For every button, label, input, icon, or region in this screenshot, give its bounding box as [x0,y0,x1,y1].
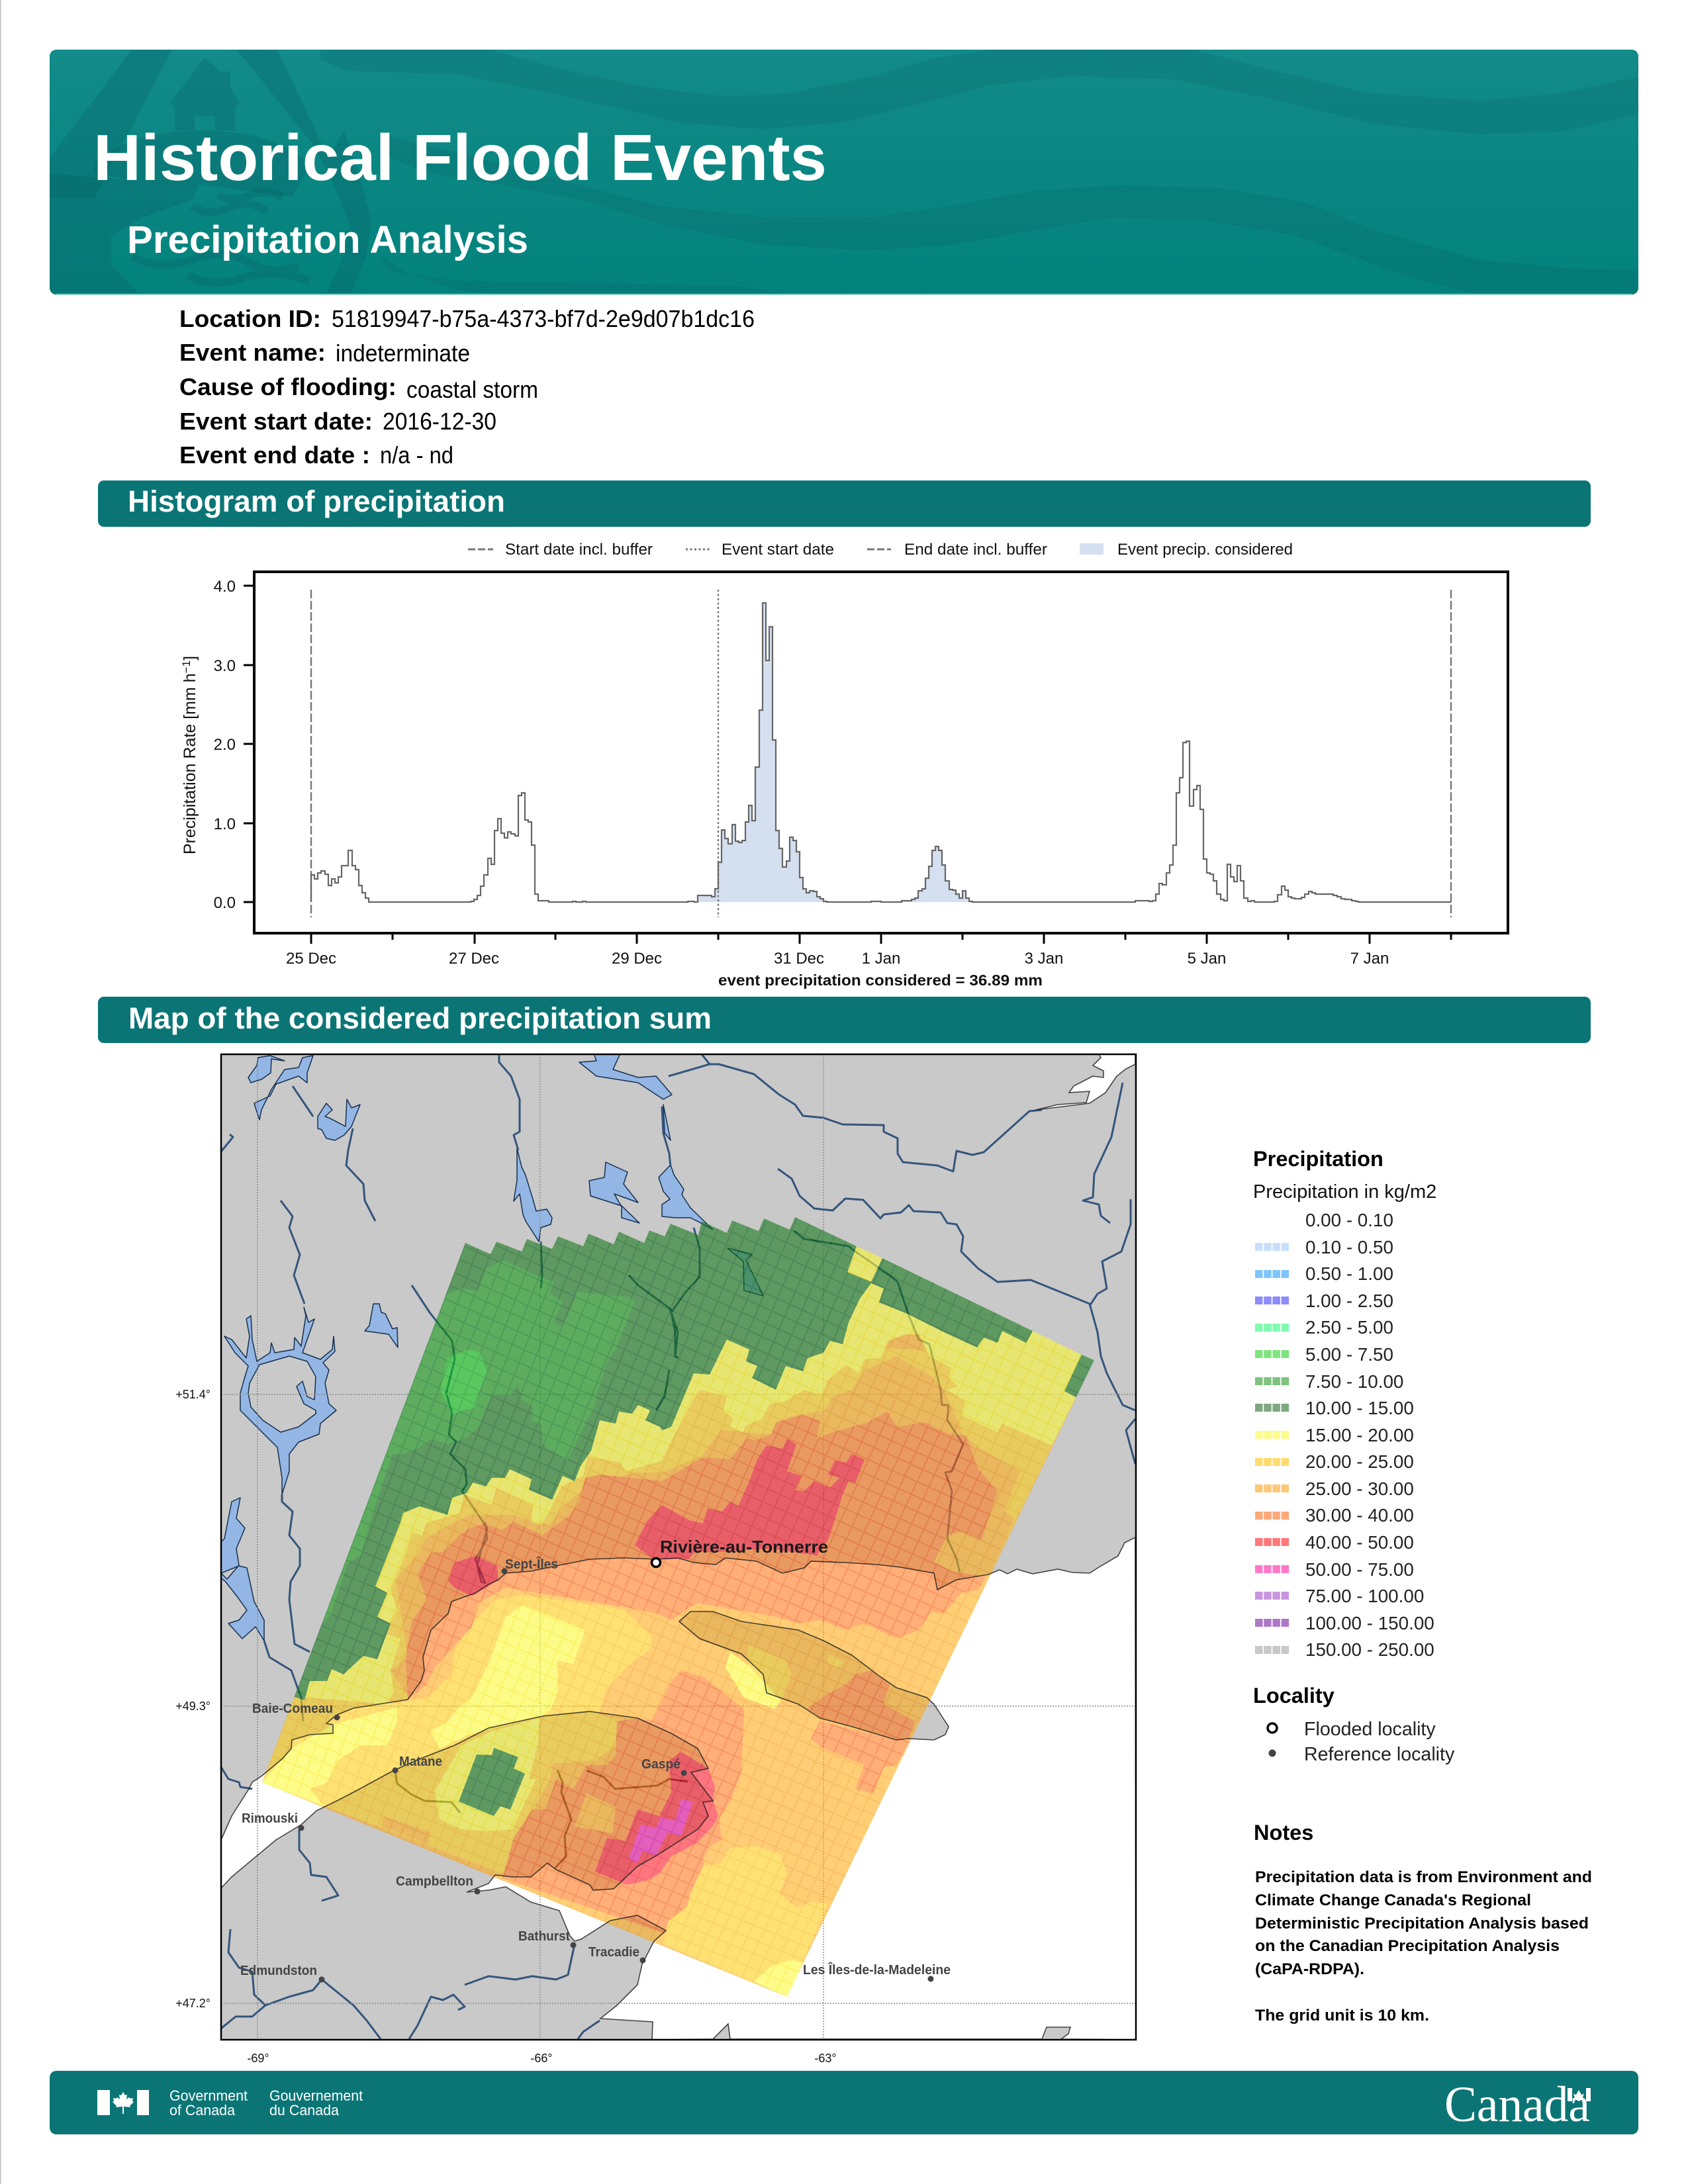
event name [179,339,470,367]
legend classes: 25.00 - 30.00 [1305,1479,1414,1499]
y axis labels: 1.0 [214,815,236,833]
latitude labels: +49.3° [175,1700,211,1713]
legend classes: 10.00 - 15.00 [1305,1398,1414,1418]
event name: indeterminate [336,340,470,367]
histogram chart [180,572,1508,989]
notes heading: Notes [1254,1821,1313,1844]
y axis ticks [244,586,254,902]
event name: Event name: [179,339,326,366]
legend classes: 75.00 - 100.00 [1305,1586,1424,1606]
locality: Les Iles-de-la-Madeleine: Les Îles-de-la-Madeleine [803,1962,951,1978]
section heading: histogram: Histogram of precipitation [128,484,505,518]
class 40-50 [262,1089,1096,1997]
x axis labels: 5 Jan [1188,950,1226,968]
y axis labels: 3.0 [214,657,236,675]
x axis ticks [311,933,1451,944]
subtitle: Precipitation Analysis [127,218,528,261]
land base [221,1054,1136,2040]
legend classes: 1.00 - 2.50 [1305,1291,1393,1311]
notes body: Deterministic Precipitation Analysis based [1255,1915,1589,1933]
map frame [221,1054,1136,2040]
y axis labels [214,578,236,912]
event metadata block [179,305,755,469]
locality: Gaspe: Gaspé [641,1757,680,1772]
event start date: Event start date: [179,408,373,435]
legend classes: 50.00 - 75.00 [1305,1559,1414,1580]
canada wordmark: Canada [1444,2077,1590,2132]
x axis labels: 31 Dec [774,950,824,968]
event end date: Event end date : [179,441,370,469]
y axis title: ] [181,656,199,660]
map [175,1052,1136,2065]
banner wave decoration [320,50,1644,296]
title: Historical Flood Events [93,121,827,194]
locality: Sept-Iles: Sept-Îles [505,1556,558,1572]
x axis labels: 1 Jan [862,950,900,968]
locality: Matane [392,1754,442,1774]
locality: Edmundston: Edmundston [240,1964,317,1978]
anticosti island [679,1612,949,1740]
section heading: histogram [98,480,1591,527]
class 20-25 patches [662,1644,843,1996]
legend classes: 7.50 - 10.00 [1305,1371,1403,1392]
section heading: map [98,997,1591,1043]
x axis labels: 29 Dec [612,950,662,968]
legend classes: 30.00 - 40.00 [1305,1505,1414,1525]
notes body [1255,1868,1592,2025]
class 10-15 [262,1089,1096,1997]
x axis labels: 7 Jan [1350,950,1389,968]
legend unit: Precipitation in kg/m2 [1253,1181,1436,1203]
section heading: map: Map of the considered precipitation sum [128,1001,712,1035]
latitude labels: +47.2° [175,1997,211,2010]
flooded locality: Riviere-au-Tonnerre: Rivière-au-Tonnerre [660,1537,828,1557]
legend classes [1255,1210,1434,1660]
class 25-30 north [381,1356,1020,1844]
legend: end date: End date incl. buffer [904,541,1047,559]
banner flood logo watermark [50,50,371,296]
class 7.5-10 [262,1089,1096,1997]
class 25-30 base [262,1217,1076,1996]
legend classes: 20.00 - 25.00 [1305,1451,1414,1472]
latitude labels [175,1388,211,2010]
legend: flooded locality: Flooded locality [1304,1719,1436,1740]
chart frame [254,572,1508,933]
notes body: The grid unit is 10 km. [1255,2007,1429,2025]
cause of flooding [179,373,538,403]
legend classes: 2.50 - 5.00 [1305,1317,1393,1338]
notes body: (CaPA-RDPA). [1255,1960,1364,1978]
legend heading: precipitation: Precipitation [1253,1147,1383,1171]
rivers [221,1052,1135,2039]
legend classes: 150.00 - 250.00 [1305,1639,1434,1660]
precipitation grid overlay [262,1217,1094,1997]
locality: Gaspe [641,1757,687,1776]
government of canada flag signature [97,2087,363,2118]
locality: Rimouski: Rimouski [242,1811,298,1826]
class 30-40 [406,1412,998,1934]
notes body: Climate Change Canada's Regional [1255,1891,1531,1909]
notes body: Precipitation data is from Environment and [1255,1868,1592,1886]
class 20-25 [262,1347,1076,1873]
legend classes: 0.10 - 0.50 [1305,1237,1393,1257]
x axis labels: 3 Jan [1025,950,1063,968]
cause of flooding: coastal storm [406,376,538,403]
longitude labels [247,2052,837,2065]
y axis labels: 0.0 [214,894,236,912]
locality: Matane: Matane [399,1754,442,1769]
header banner [50,50,1644,296]
locality: Baie-Comeau: Baie-Comeau [252,1702,333,1716]
x axis labels: 27 Dec [449,950,499,968]
location id: 51819947-b75a-4373-bf7d-2e9d07b1dc16 [332,305,755,332]
legend: start date: Start date incl. buffer [505,541,653,559]
legend classes: 5.00 - 7.50 [1305,1344,1393,1365]
latitude labels: +51.4° [175,1388,211,1401]
event end date [179,441,453,469]
legend: reference locality: Reference locality [1304,1744,1455,1765]
y axis labels: 4.0 [214,578,236,596]
government of canada flag signature: Government [169,2087,248,2104]
map legend [1253,1147,1455,1765]
longitude labels: -69° [247,2052,269,2065]
flooded locality: Riviere-au-Tonnerre [651,1537,828,1567]
gaspe rivers [395,1770,688,1868]
class 15-20 [262,1246,1094,1997]
reference localities [240,1556,951,1983]
location id: Location ID: [179,305,321,332]
precipitation rate step line [311,603,1451,902]
locality: Campbellton: Campbellton [396,1874,473,1889]
vertical reference lines [311,590,1451,917]
event start date: 2016-12-30 [383,408,496,435]
locality: Tracadie: Tracadie [588,1945,639,1960]
event start date [179,408,496,435]
class 50-75 [262,1089,1096,1997]
cause of flooding: Cause of flooding: [179,373,397,400]
class 5-7.5 [262,1089,1096,1997]
legend classes: 15.00 - 20.00 [1305,1425,1414,1445]
gulf water [221,1052,1136,2040]
legend: event precip: Event precip. considered [1117,541,1293,559]
map graticule [221,1054,1136,2040]
event end date: n/a - nd [380,441,453,469]
coastlines [221,1052,1136,2040]
legend classes: 0.00 - 0.10 [1305,1210,1393,1230]
y axis title: −1 [180,660,193,673]
y axis title: Precipitation Rate [mm h [181,673,199,854]
legend: event start: Event start date [722,541,834,559]
government of canada flag signature: Gouvernement [269,2087,363,2104]
footer bar [50,2071,1638,2134]
histogram legend [468,541,1293,559]
notes body: on the Canadian Precipitation Analysis [1255,1937,1560,1955]
lakes [221,1054,763,1641]
locality: Campbellton [396,1874,481,1894]
notes [1254,1821,1592,2025]
longitude labels: -63° [814,2052,837,2065]
x axis labels [286,950,1389,968]
longitude labels: -66° [530,2052,553,2065]
class 25-30 patch [575,1794,616,1833]
x axis labels: 25 Dec [286,950,336,968]
legend classes: 0.50 - 1.00 [1305,1263,1393,1284]
legend classes: 100.00 - 150.00 [1305,1613,1434,1633]
legend heading: locality: Locality [1253,1684,1335,1707]
event precipitation shaded area [698,603,969,902]
government of canada flag signature: of Canada [169,2102,236,2118]
y axis labels: 2.0 [214,736,236,754]
locality: Bathurst: Bathurst [518,1929,570,1944]
government of canada flag signature: du Canada [269,2102,340,2118]
event precipitation sum: event precipitation considered = 36.89 mm [718,972,1043,989]
legend classes: 40.00 - 50.00 [1305,1532,1414,1553]
